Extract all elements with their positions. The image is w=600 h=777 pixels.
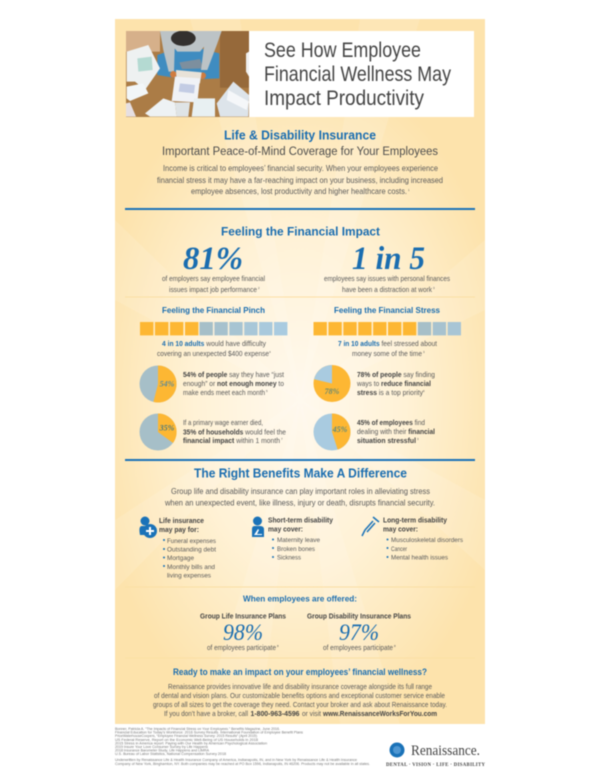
- list: long-term disability: Mental health issues: [391, 554, 449, 562]
- pie chart: 54%: [140, 365, 177, 402]
- caption: 4 in 10 adults: covering an unexpected $400 expense: [157, 349, 269, 358]
- list: life insurance: Life insurance: [159, 518, 204, 525]
- pie chart: 78%: [314, 365, 350, 402]
- header white banner: [249, 31, 474, 117]
- list: short-term disability: Short-term disability: [268, 518, 333, 524]
- heading: When employees are offered: When employees are offered:: [243, 594, 357, 604]
- caption: 7 in 10 adults: money some of the time: [352, 349, 422, 358]
- text: 54% of people: 54% of people say they have “just: [183, 370, 284, 379]
- caption: 7 in 10 adults: [338, 339, 437, 358]
- text: 35% of households: 7: [281, 437, 283, 441]
- pie chart: 45%: 45%: [332, 425, 348, 434]
- stat: group disability 97%: 97%: [339, 620, 379, 645]
- list: short-term disability: Maternity leave: [277, 537, 320, 544]
- text: 35% of households: financial impact within 1 month: [183, 436, 280, 445]
- intro heading: [162, 128, 438, 158]
- text: 78% of people: 78% of people say finding: [357, 370, 435, 379]
- caption: 4 in 10 adults: 4 in 10 adults would have difficulty: [162, 339, 266, 348]
- stat: group disability 97%: of employees participate: [323, 645, 393, 652]
- benefits paragraph: Group life and disability insurance can play important roles in alleviating stress: [171, 486, 430, 496]
- text: 78% of people: ways to reduce financial: [356, 379, 431, 388]
- stat: 81%: [162, 241, 265, 294]
- title: See How Employee: [264, 39, 421, 62]
- pie chart: 54%: 54%: [160, 380, 175, 388]
- footnotes: Company of New York, Binghamton, NY. Both companies may be reached at PO Box 1596, Indianapolis, IN 46206. Products may not be available in all states.: [115, 762, 370, 766]
- list: short-term disability: [268, 518, 333, 562]
- list: life insurance: Monthly bills and: [167, 564, 215, 571]
- footnotes: Bonner, Patricia A. “The Impacts of Financial Stress on Your Employees.” Benefits Magazine, June 2016.: [115, 727, 280, 731]
- footnotes: 2018 Insurance Barometer Study, Life Happens and LIMRA: [115, 749, 210, 753]
- footnotes: Financial Education for Today’s Workforce: 2016 Survey Results. International Foundation of Employee Benefit Plans: [115, 731, 303, 735]
- column: short-term disability: [252, 516, 333, 562]
- icon: crutch: [362, 517, 379, 536]
- pie chart: 35%: 35%: [159, 424, 175, 432]
- text: 45% of employees: 45% of employees find: [357, 418, 425, 427]
- header photo: documents spread on a wood floor: [126, 31, 249, 117]
- text: 54% of people: make ends meet each month: [183, 388, 265, 397]
- text: 54% of people: [183, 370, 284, 397]
- stat: 1 in 5: 1 in 5: [352, 241, 425, 277]
- list: life insurance: living expenses: [167, 572, 212, 580]
- text: 54% of people: 5: [266, 389, 268, 393]
- footnotes: Underwritten by Renaissance Life & Health Insurance Company of America, Indianapolis, IN, and in New York by Renaissance Life & Health Insurance: [115, 758, 357, 762]
- text: 35% of households: 35% of households would feel the: [183, 428, 286, 436]
- stat: 81%: 81%: [183, 241, 243, 277]
- list: life insurance: may pay for:: [159, 527, 199, 534]
- closing paragraph: 1-800-963-4596: [250, 709, 300, 718]
- stat: 1 in 5: have been a distraction at work: [342, 285, 432, 294]
- title: Impact Productivity: [264, 87, 424, 110]
- intro heading: Life & Disability Insurance: [224, 128, 376, 142]
- list: short-term disability: Sickness: [277, 554, 302, 562]
- closing paragraph: of dental and vision plans. Our customizable benefits options and exceptional customer service enable: [154, 691, 445, 700]
- pie chart: 78%: 78%: [325, 387, 340, 396]
- caption: 4 in 10 adults: 4: [269, 350, 271, 354]
- list: short-term disability: may cover:: [268, 526, 303, 534]
- icon: Renaissance globe: [390, 742, 404, 758]
- stat: 1 in 5: 3: [433, 286, 435, 290]
- text: 45% of employees: situation stressful: [357, 436, 416, 445]
- heading: Feeling the Financial Impact: Feeling the Financial Impact: [221, 226, 380, 238]
- logo: Renaissance: Renaissance.: [411, 743, 480, 759]
- icon: person with shield: [139, 516, 157, 538]
- logo: Renaissance: [386, 742, 486, 768]
- stat: 1 in 5: [324, 241, 450, 294]
- text: 45% of employees: dealing with their financial: [357, 427, 435, 436]
- caption: 7 in 10 adults: 3: [423, 350, 425, 354]
- list: long-term disability: Cancer: [391, 546, 408, 553]
- squares: 7 in 10: [314, 322, 461, 335]
- list: long-term disability: [383, 518, 464, 562]
- closing paragraph: [153, 682, 447, 718]
- list: life insurance: [159, 518, 217, 580]
- text: 78% of people: stress is a top priority: [357, 388, 423, 397]
- stat: 81%: of employers say employee financial: [162, 274, 265, 283]
- heading: pinch: Feeling the Financial Pinch: [162, 306, 265, 315]
- panel: Feeling the Financial Stress: [314, 306, 461, 450]
- closing paragraph: groups of all sizes to get the coverage they need. Contact your broker and ask about Renaissance today.: [153, 700, 447, 709]
- title: [264, 39, 451, 110]
- stat: group disability 97%: Group Disability Insurance Plans: [307, 614, 411, 620]
- heading: stress: Feeling the Financial Stress: [334, 306, 440, 315]
- text: 78% of people: [356, 370, 435, 397]
- footnotes: 2015 Stress in America report: Paying with Our Health by American Psychological Association: [115, 741, 267, 745]
- title: Financial Wellness May: [264, 63, 451, 86]
- list: short-term disability: Broken bones: [277, 546, 316, 553]
- intro paragraph: employee absences, lost productivity and higher healthcare costs.: [191, 186, 407, 196]
- text: 54% of people: enough” or not enough money to: [183, 379, 284, 388]
- background panel: [115, 19, 485, 724]
- column: life insurance: [139, 516, 217, 580]
- footnotes: [115, 727, 370, 766]
- closing paragraph: If you don’t have a broker, call: [164, 709, 248, 718]
- stat: group life 98%: [200, 614, 286, 652]
- heading: Ready to make an impact: Ready to make an impact on your employees’ financial wellness?: [173, 667, 427, 677]
- heading: The Right Benefits Make A Difference: The Right Benefits Make A Difference: [194, 466, 407, 480]
- closing paragraph: or visit: [302, 709, 321, 718]
- benefits paragraph: [164, 486, 435, 508]
- squares: 4 in 10: [140, 322, 287, 335]
- panel: Feeling the Financial Pinch: [140, 306, 287, 450]
- footnotes: 2019 Insure Your Love Consumer Survey by Life Happens: [115, 745, 208, 749]
- intro paragraph: financial stress it may have a far-reaching impact on your business, including increased: [157, 175, 443, 185]
- intro heading: Important Peace-of-Mind Coverage for Your Employees: [162, 146, 438, 158]
- stat: group disability 97%: 8: [394, 644, 396, 648]
- column: long-term disability: [362, 517, 464, 562]
- list: life insurance: Funeral expenses: [167, 538, 217, 545]
- stat: 81%: issues impact job performance: [169, 285, 257, 294]
- stat: group disability 97%: [307, 614, 411, 652]
- stat: group life 98%: of employees participate: [207, 645, 276, 652]
- text: 45% of employees: 3: [417, 437, 419, 441]
- pie chart: 45%: [314, 414, 350, 450]
- footnotes: U.S. Bureau of Labor Statistics, National Compensation Survey 2018: [115, 752, 226, 756]
- text: 35% of households: [183, 418, 286, 445]
- intro paragraph: 1: [408, 188, 410, 192]
- closing paragraph: Renaissance provides innovative life and disability insurance coverage alongside its full range: [168, 682, 432, 691]
- logo: Renaissance: DENTAL · VISION · LIFE · DISABILITY: [386, 763, 486, 768]
- footnotes: US Federal Reserve, Report on the Economic Well-Being of US Households in 2018: [115, 738, 258, 742]
- pie chart: 35%: [140, 413, 177, 450]
- footnotes: PriceWaterhouseCoopers, “Employee Financial Wellness Survey: 2015 Results” (April 2015): [115, 734, 257, 738]
- list: life insurance: Mortgage: [167, 555, 194, 562]
- list: life insurance: Outstanding debt: [167, 546, 216, 554]
- intro paragraph: [157, 163, 443, 196]
- list: long-term disability: Long-term disability: [383, 518, 447, 524]
- icon: person with arm sling: [252, 516, 264, 537]
- caption: 4 in 10 adults: [157, 339, 271, 358]
- stat: 81%: 2: [258, 286, 260, 290]
- closing paragraph: www.RenaissanceWorksForYou.com: [322, 709, 437, 718]
- caption: 7 in 10 adults: 7 in 10 adults feel stressed about: [338, 339, 437, 348]
- stat: group life 98%: Group Life Insurance Plans: [200, 614, 286, 620]
- text: 45% of employees: [357, 418, 435, 445]
- intro paragraph: Income is critical to employees’ financial security. When your employees experience: [163, 163, 438, 173]
- text: 78% of people: 6: [423, 389, 425, 393]
- stat: group life 98%: 8: [277, 644, 279, 648]
- list: long-term disability: may cover:: [383, 526, 418, 534]
- stat: 1 in 5: employees say issues with personal finances: [324, 274, 450, 283]
- benefits paragraph: when an unexpected event, like illness, injury or death, disrupts financial security.: [164, 498, 435, 508]
- text: 35% of households: If a primary wage earner died,: [183, 418, 263, 427]
- list: long-term disability: Musculoskeletal disorders: [391, 537, 464, 544]
- stat: group life 98%: 98%: [223, 620, 263, 645]
